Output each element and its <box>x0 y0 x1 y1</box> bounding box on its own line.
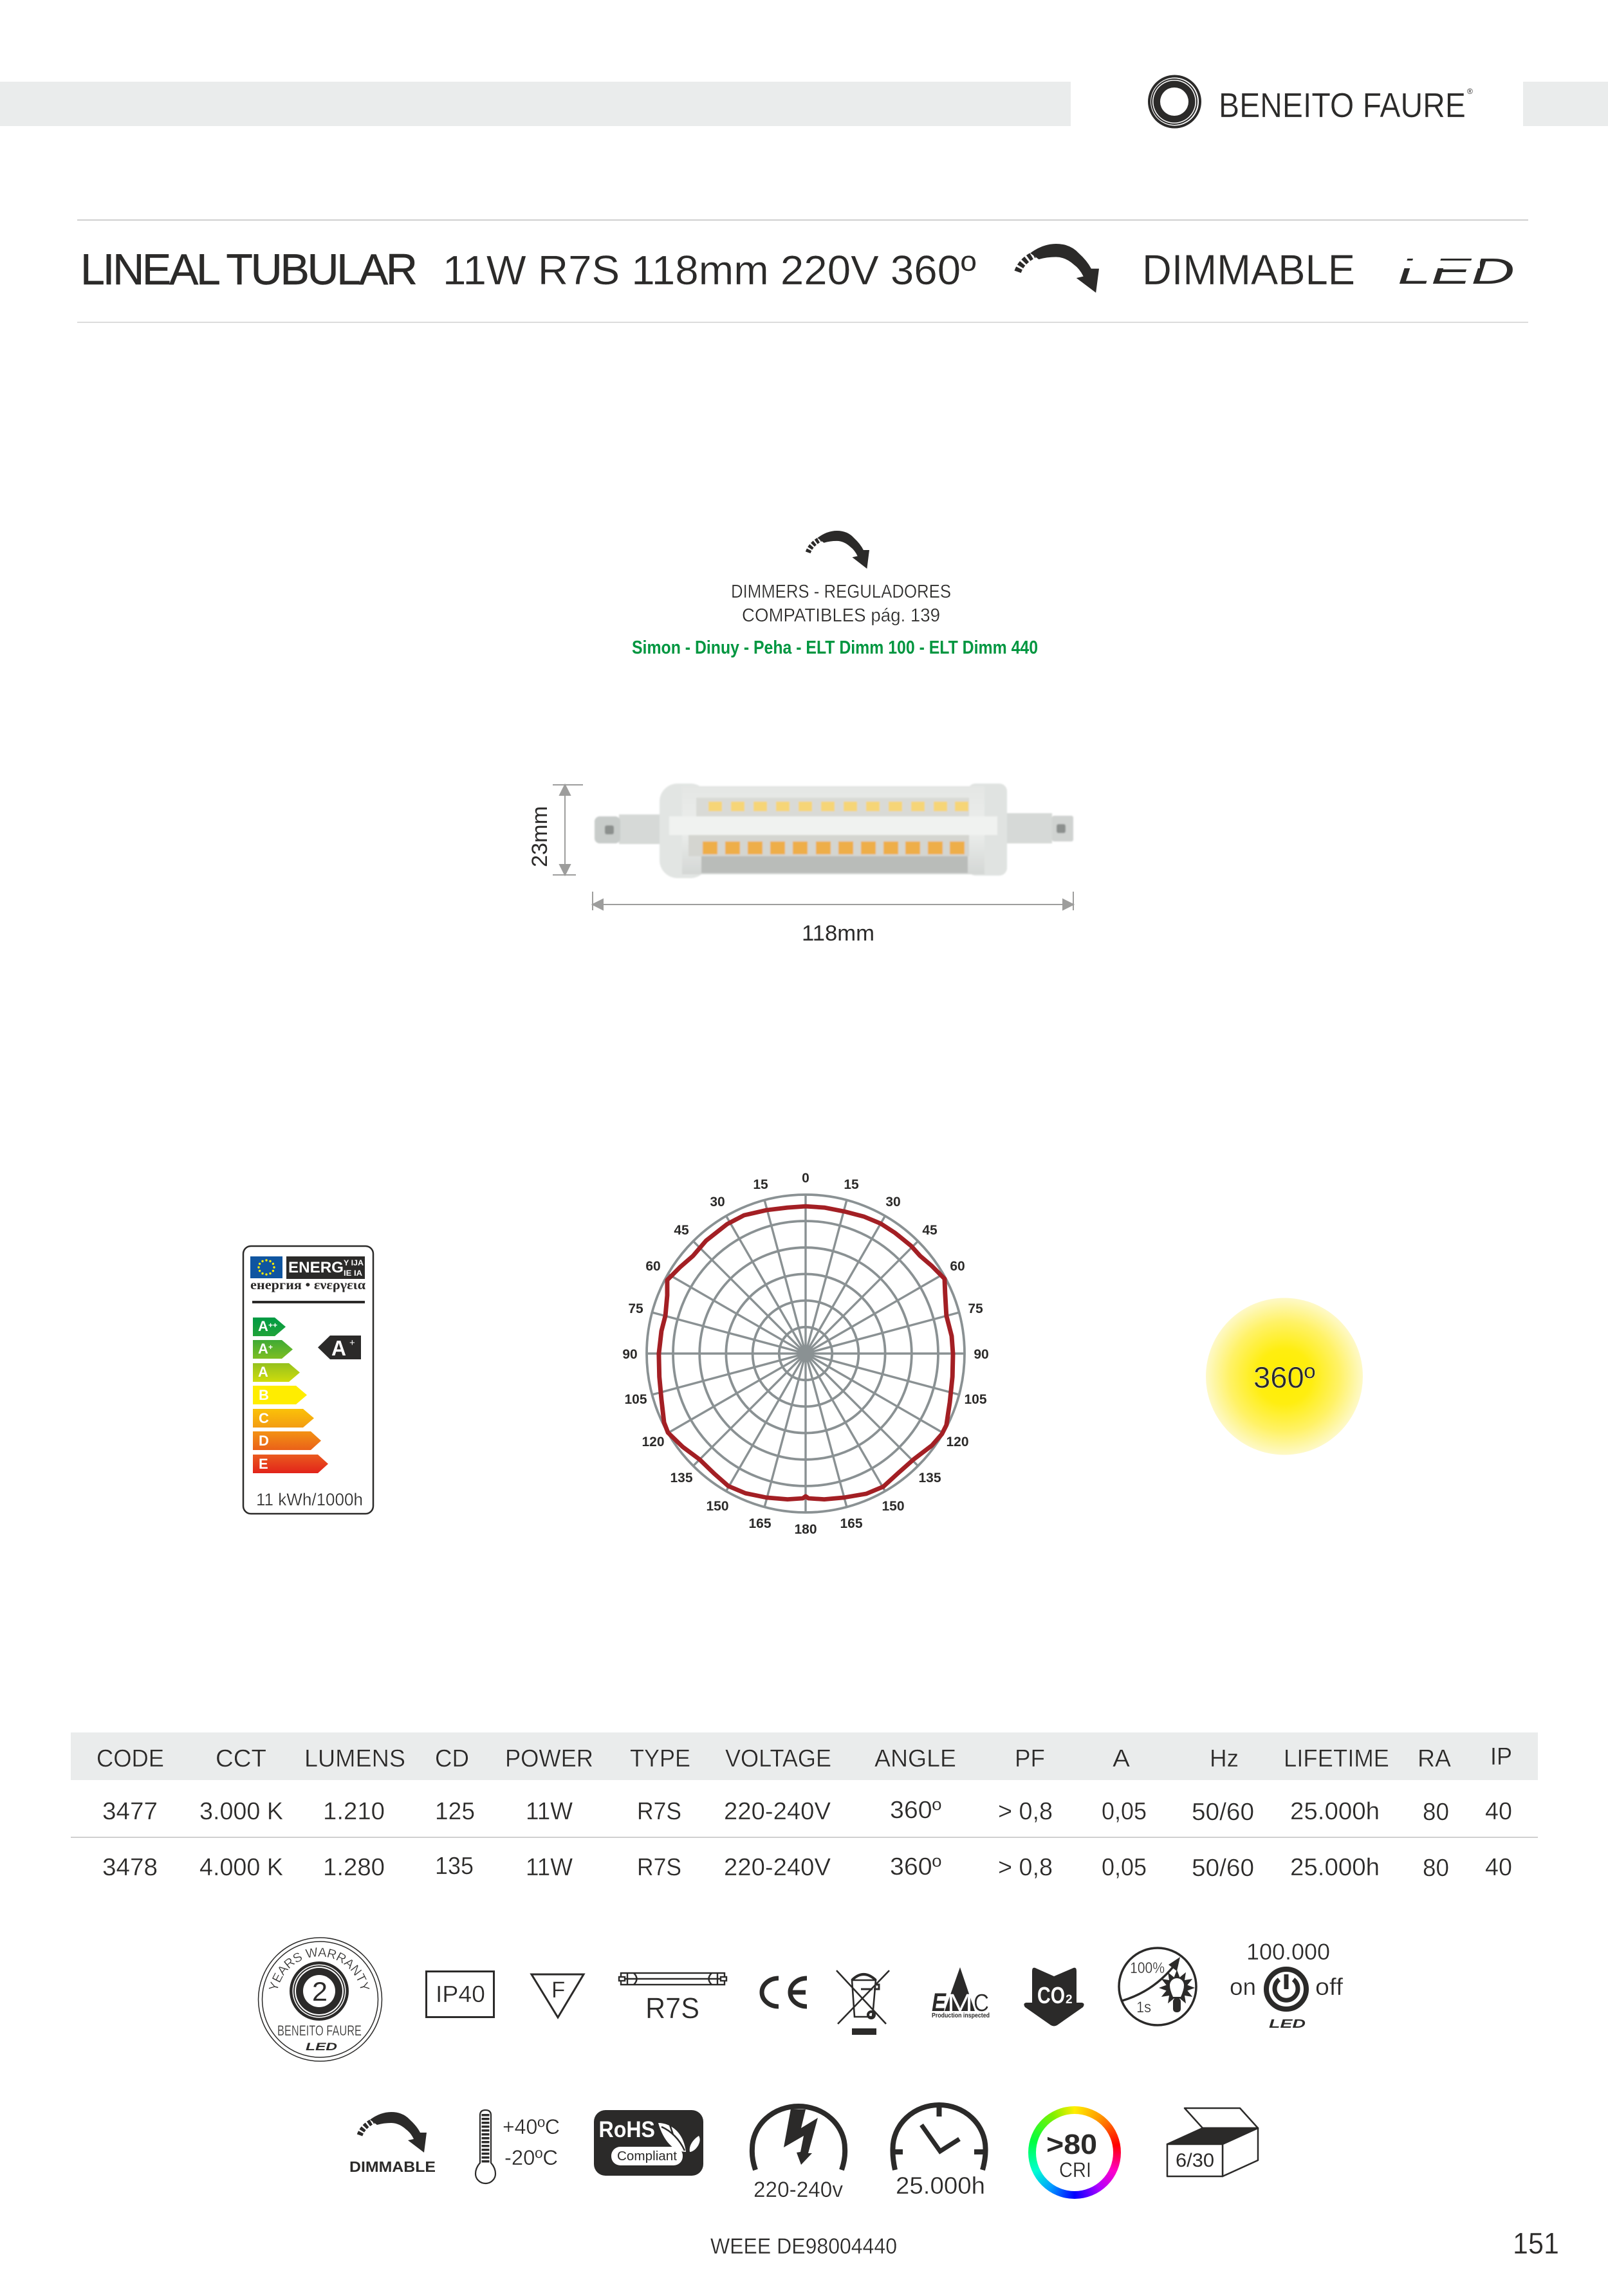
icon: EMC: Production inspected <box>932 2012 990 2019</box>
angle labels <box>622 1171 989 1537</box>
icon: CO2 arrow: 2 <box>1066 1993 1073 2007</box>
row 3478: 1.280 <box>323 1854 385 1881</box>
rating pointer A+: + <box>349 1337 355 1348</box>
brand logo <box>1148 75 1473 129</box>
angle labels: 135 <box>918 1471 941 1485</box>
row 3478: 40 <box>1485 1854 1512 1881</box>
header band left <box>0 82 1071 126</box>
icon: EMC: C <box>974 1990 989 2017</box>
rating pointer A+ <box>318 1336 361 1360</box>
title block <box>80 244 1515 294</box>
table header: Hz <box>1210 1745 1239 1772</box>
glow circle <box>1206 1298 1363 1455</box>
class B: B <box>259 1387 269 1403</box>
icon: dimmable arrow <box>1018 244 1099 293</box>
ENERGY header: ENERG <box>288 1259 344 1276</box>
distribution curve <box>659 1206 953 1500</box>
ENERGY header <box>286 1256 365 1279</box>
row 3478: 0,05 <box>1102 1854 1147 1881</box>
row 3478 <box>102 1853 1512 1882</box>
icon: warranty seal: LED <box>306 2041 337 2053</box>
icon: RoHS compliant: RoHS <box>598 2117 655 2142</box>
class A++ <box>253 1318 286 1336</box>
icon: instant start <box>1119 1948 1196 2025</box>
icon: dimmer arrow <box>808 531 869 569</box>
icon: warranty seal: BENEITO FAURE <box>277 2023 362 2039</box>
row 3478: 4.000 K <box>199 1854 283 1881</box>
class A: A <box>258 1364 268 1380</box>
icon: IP40 <box>426 1971 494 2017</box>
row 3477: 125 <box>435 1798 475 1825</box>
angle labels: 180 <box>794 1522 817 1537</box>
brand name: BENEITO FAURE <box>1219 86 1466 125</box>
icon: lifetime clock: 25.000h <box>896 2172 985 2199</box>
angle labels: 60 <box>645 1259 661 1274</box>
angle labels: 60 <box>950 1259 965 1274</box>
icon: warranty seal: 2 <box>312 1976 328 2007</box>
title: product name: LINEAL TUBULAR <box>80 245 418 294</box>
icon: switching cycles: on <box>1230 1974 1256 2000</box>
height dimension <box>553 785 583 875</box>
icon: F triangle <box>531 1974 584 2017</box>
angle labels: 165 <box>840 1516 863 1531</box>
dimmers heading line 2: COMPATIBLES pág. 139 <box>742 605 940 626</box>
header band right <box>1523 82 1608 126</box>
class A++: ++ <box>268 1321 277 1330</box>
angle labels: 150 <box>882 1499 905 1514</box>
row 3478: 80 <box>1423 1855 1449 1882</box>
row 3478: > 0,8 <box>998 1854 1053 1881</box>
icon: dimmable <box>349 2112 436 2175</box>
icon: warranty seal <box>257 1937 382 2062</box>
angle labels: 0 <box>802 1171 809 1186</box>
table header: LUMENS <box>304 1745 405 1772</box>
angle labels: 105 <box>964 1392 987 1407</box>
angle labels: 135 <box>670 1471 693 1485</box>
specification table <box>71 1732 1538 1882</box>
row 3477: 1.210 <box>323 1798 385 1825</box>
row 3478: 25.000h <box>1290 1854 1380 1881</box>
row 3477: 220-240V <box>724 1798 831 1825</box>
icon: instant start: 1s <box>1136 1999 1151 2016</box>
registered mark: ® <box>1467 87 1473 96</box>
table header: RA <box>1418 1745 1452 1772</box>
energy label <box>243 1246 373 1514</box>
angle labels: 45 <box>922 1223 938 1238</box>
polar light distribution chart <box>622 1171 989 1537</box>
row 3477: 40 <box>1485 1798 1512 1825</box>
row 3478: R7S <box>637 1854 681 1881</box>
row 3477: 3477 <box>102 1798 158 1825</box>
icon: temperature range: +40ºC <box>503 2115 560 2138</box>
polar grid <box>647 1195 965 1512</box>
consumption: 11 kWh/1000h <box>256 1490 363 1509</box>
class C: C <box>259 1410 269 1426</box>
WEEE registration: WEEE DE98004440 <box>710 2234 897 2259</box>
icon: packaging box <box>1167 2108 1258 2176</box>
EU flag <box>250 1256 282 1278</box>
energy multilingual text: енергия • ενεργεια <box>250 1278 365 1292</box>
class A+: A <box>258 1341 268 1357</box>
icon: voltage gauge: 220-240v <box>753 2178 843 2202</box>
table header: A <box>1113 1745 1131 1772</box>
table header: CODE <box>97 1745 164 1772</box>
angle labels: 120 <box>946 1435 969 1449</box>
icon: dimmable: DIMMABLE <box>349 2158 436 2175</box>
LED logo: LED <box>1398 251 1515 292</box>
ENERGY header: IE IA <box>344 1269 362 1278</box>
CRI value <box>1046 2129 1097 2181</box>
icon: switching cycles <box>1230 1940 1344 2030</box>
icon: crossed-out bin <box>836 1970 889 2035</box>
row 3478: 11W <box>526 1854 573 1881</box>
class A+ <box>253 1340 293 1359</box>
icon: temperature range <box>476 2110 560 2183</box>
angle labels: 15 <box>753 1177 768 1192</box>
icon: CO2 arrow: CO <box>1037 1982 1065 2008</box>
lamp photo with dimensions <box>528 784 1073 946</box>
row 3478: 50/60 <box>1192 1855 1254 1882</box>
row 3477: 50/60 <box>1192 1799 1254 1826</box>
icon: CE mark <box>762 1978 807 2007</box>
angle labels: 165 <box>748 1516 772 1531</box>
icon: EMC: M <box>947 1990 973 2017</box>
class bars <box>253 1318 328 1473</box>
title: dimmable: DIMMABLE <box>1142 246 1355 293</box>
angle labels: 30 <box>710 1195 725 1209</box>
icon: RoHS compliant: Compliant <box>617 2149 677 2163</box>
compatible brands: Simon - Dinuy - Peha - ELT Dimm 100 - ELT Dimm 440 <box>632 638 1038 658</box>
dimmers block <box>632 531 1038 658</box>
height label: 23mm <box>528 806 552 867</box>
class B <box>253 1386 307 1404</box>
class E <box>253 1455 328 1473</box>
row 3477: R7S <box>637 1798 681 1825</box>
class A+: + <box>268 1343 273 1352</box>
class E: E <box>259 1456 268 1472</box>
icon: R7S tube <box>619 1973 726 2025</box>
bottom row of LEDs <box>703 841 965 854</box>
row 3478: 135 <box>435 1853 474 1880</box>
lamp photo <box>595 784 1073 878</box>
angle text: 360º <box>1253 1361 1315 1394</box>
icon: EMC: E <box>932 1988 947 2017</box>
angle labels: 90 <box>974 1347 989 1362</box>
icon: warranty seal: YEARS WARRANTY <box>269 1947 369 1989</box>
table header: LIFETIME <box>1284 1745 1389 1772</box>
rating pointer A+: A <box>331 1336 346 1360</box>
row 3478: 220-240V <box>724 1854 831 1881</box>
icon: EMC <box>932 1967 990 2019</box>
row 3477: 25.000h <box>1290 1798 1380 1825</box>
icon: instant start: 100% <box>1130 1960 1165 1977</box>
table header: VOLTAGE <box>725 1745 831 1772</box>
angle labels: 45 <box>674 1223 689 1238</box>
class D: D <box>259 1433 269 1449</box>
LED logo <box>1393 251 1515 292</box>
label frame <box>243 1246 373 1514</box>
icon: switching cycles: off <box>1315 1974 1344 2000</box>
table header: IP <box>1490 1743 1512 1770</box>
logo rings <box>1148 75 1201 129</box>
dimmers heading line 1: DIMMERS - REGULADORES <box>731 582 951 602</box>
icon: switching cycles: LED <box>1269 2017 1306 2030</box>
icon: packaging box: 6/30 <box>1176 2150 1214 2171</box>
angle labels: 75 <box>628 1301 643 1316</box>
table header <box>71 1732 1538 1780</box>
table header: POWER <box>505 1745 593 1772</box>
CRI value: >80 <box>1046 2129 1097 2160</box>
width dimension <box>593 892 1073 910</box>
angle labels: 90 <box>622 1347 638 1362</box>
angle labels: 15 <box>844 1177 859 1192</box>
icon: temperature range: -20ºC <box>504 2146 558 2169</box>
icon: voltage gauge <box>752 2106 845 2202</box>
icon: IP40: IP40 <box>436 1981 485 2007</box>
CRI value: CRI <box>1059 2158 1091 2181</box>
class C <box>253 1409 314 1428</box>
ENERGY header: Y IJA <box>344 1258 364 1267</box>
row 3477: > 0,8 <box>998 1798 1053 1825</box>
row 3477 <box>102 1797 1512 1826</box>
angle labels: 150 <box>706 1499 729 1514</box>
title: specification: 11W R7S 118mm 220V 360º <box>443 247 976 293</box>
class D <box>253 1431 321 1450</box>
label rule <box>252 1301 365 1303</box>
angle labels: 120 <box>642 1435 665 1449</box>
class A <box>253 1363 300 1382</box>
top row of LEDs <box>708 802 968 811</box>
row 3477: 360º <box>890 1797 941 1824</box>
page number: 151 <box>1513 2227 1559 2260</box>
row 3477: 80 <box>1423 1799 1449 1826</box>
row 3478: 3478 <box>102 1854 158 1881</box>
icon: CO2 arrow <box>1024 1968 1084 2026</box>
row 3477: 0,05 <box>1102 1798 1147 1825</box>
angle labels: 105 <box>624 1392 647 1407</box>
row 3477: 3.000 K <box>199 1798 283 1825</box>
table header: TYPE <box>630 1745 690 1772</box>
360 degree badge <box>1206 1298 1363 1455</box>
class A++: A <box>258 1318 268 1334</box>
icon: lifetime clock <box>892 2104 986 2199</box>
row 3477: 11W <box>526 1798 573 1825</box>
title rules <box>77 219 1528 221</box>
icon: R7S tube: R7S <box>645 1992 699 2025</box>
icon: switching cycles: 100.000 <box>1246 1940 1330 1965</box>
angle labels: 30 <box>885 1195 901 1209</box>
row 3478: 360º <box>890 1853 941 1880</box>
icon: F triangle: F <box>551 1978 565 2003</box>
table header: CD <box>435 1745 469 1772</box>
icon: RoHS compliant <box>594 2110 703 2176</box>
icon: CRI colour ring <box>1028 2106 1121 2199</box>
table header: PF <box>1015 1745 1045 1772</box>
table header: ANGLE <box>874 1745 956 1772</box>
angle labels: 75 <box>968 1301 983 1316</box>
width label: 118mm <box>802 921 874 946</box>
table header: CCT <box>216 1745 266 1772</box>
